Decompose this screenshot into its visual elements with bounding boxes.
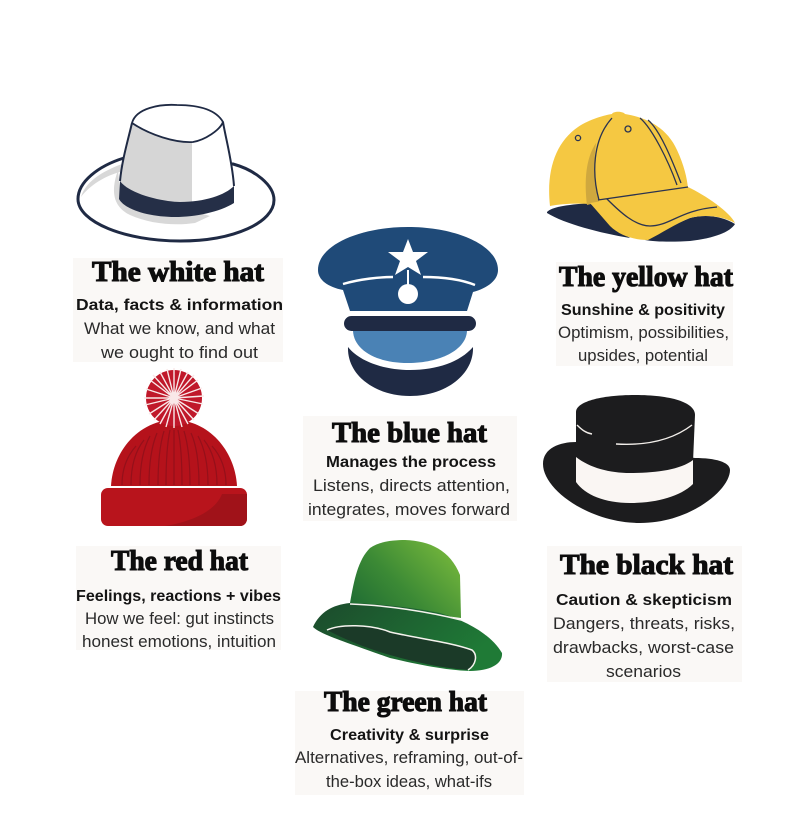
text: white hat caption — [73, 257, 283, 362]
text: black hat caption — [547, 546, 742, 682]
text: white hat caption: we ought to find out — [100, 344, 258, 362]
panel: green hat — [295, 540, 524, 795]
panel: yellow hat — [547, 112, 735, 366]
text: yellow hat caption: upsides, potential — [578, 347, 708, 365]
text: yellow hat caption: Sunshine & positivity — [561, 302, 725, 319]
text: yellow hat caption — [556, 262, 734, 366]
icon: yellow cap — [547, 112, 735, 242]
text: green hat caption: The green hat — [324, 687, 488, 718]
text: red hat caption: Feelings, reactions + vibes — [76, 588, 281, 605]
text: yellow hat caption: The yellow hat — [559, 262, 734, 293]
text: green hat caption: Creativity & surprise — [330, 727, 489, 744]
panel: black hat — [543, 395, 742, 682]
text: red hat caption: How we feel: gut instincts — [85, 610, 274, 628]
panel: red hat — [76, 368, 281, 651]
text: white hat caption: The white hat — [92, 257, 265, 288]
text: red hat caption: honest emotions, intuition — [82, 633, 276, 651]
text: red hat caption — [76, 546, 281, 651]
text: red hat caption: The red hat — [111, 546, 249, 577]
text: green hat caption: Alternatives, reframing, out-of- — [295, 749, 523, 767]
text: yellow hat caption: Optimism, possibilities, — [558, 324, 729, 342]
text: green hat caption: the-box ideas, what-ifs — [326, 773, 492, 791]
icon: black bowler hat — [543, 395, 730, 523]
icon: white hat — [78, 105, 274, 241]
text: blue hat caption — [303, 416, 517, 521]
text: green hat caption — [295, 687, 524, 795]
panel: white hat — [73, 105, 283, 362]
icon: green bowler hat — [313, 540, 502, 671]
text: white hat caption: Data, facts & information — [76, 297, 283, 314]
icon: red beanie — [101, 368, 247, 526]
text: black hat caption: drawbacks, worst-case — [553, 639, 734, 657]
text: blue hat caption: Listens, directs attention, — [313, 477, 510, 495]
text: black hat caption: Caution & skepticism — [556, 592, 732, 609]
text: blue hat caption: The blue hat — [332, 418, 488, 449]
text: black hat caption: The black hat — [560, 550, 734, 581]
text: black hat caption: scenarios — [606, 663, 681, 681]
text: blue hat caption: integrates, moves forward — [308, 501, 510, 519]
text: white hat caption: What we know, and what — [84, 320, 275, 338]
text: black hat caption: Dangers, threats, risks, — [553, 615, 735, 633]
panel: blue hat — [303, 227, 517, 521]
icon: blue officer cap — [318, 227, 498, 396]
text: blue hat caption: Manages the process — [326, 454, 496, 471]
